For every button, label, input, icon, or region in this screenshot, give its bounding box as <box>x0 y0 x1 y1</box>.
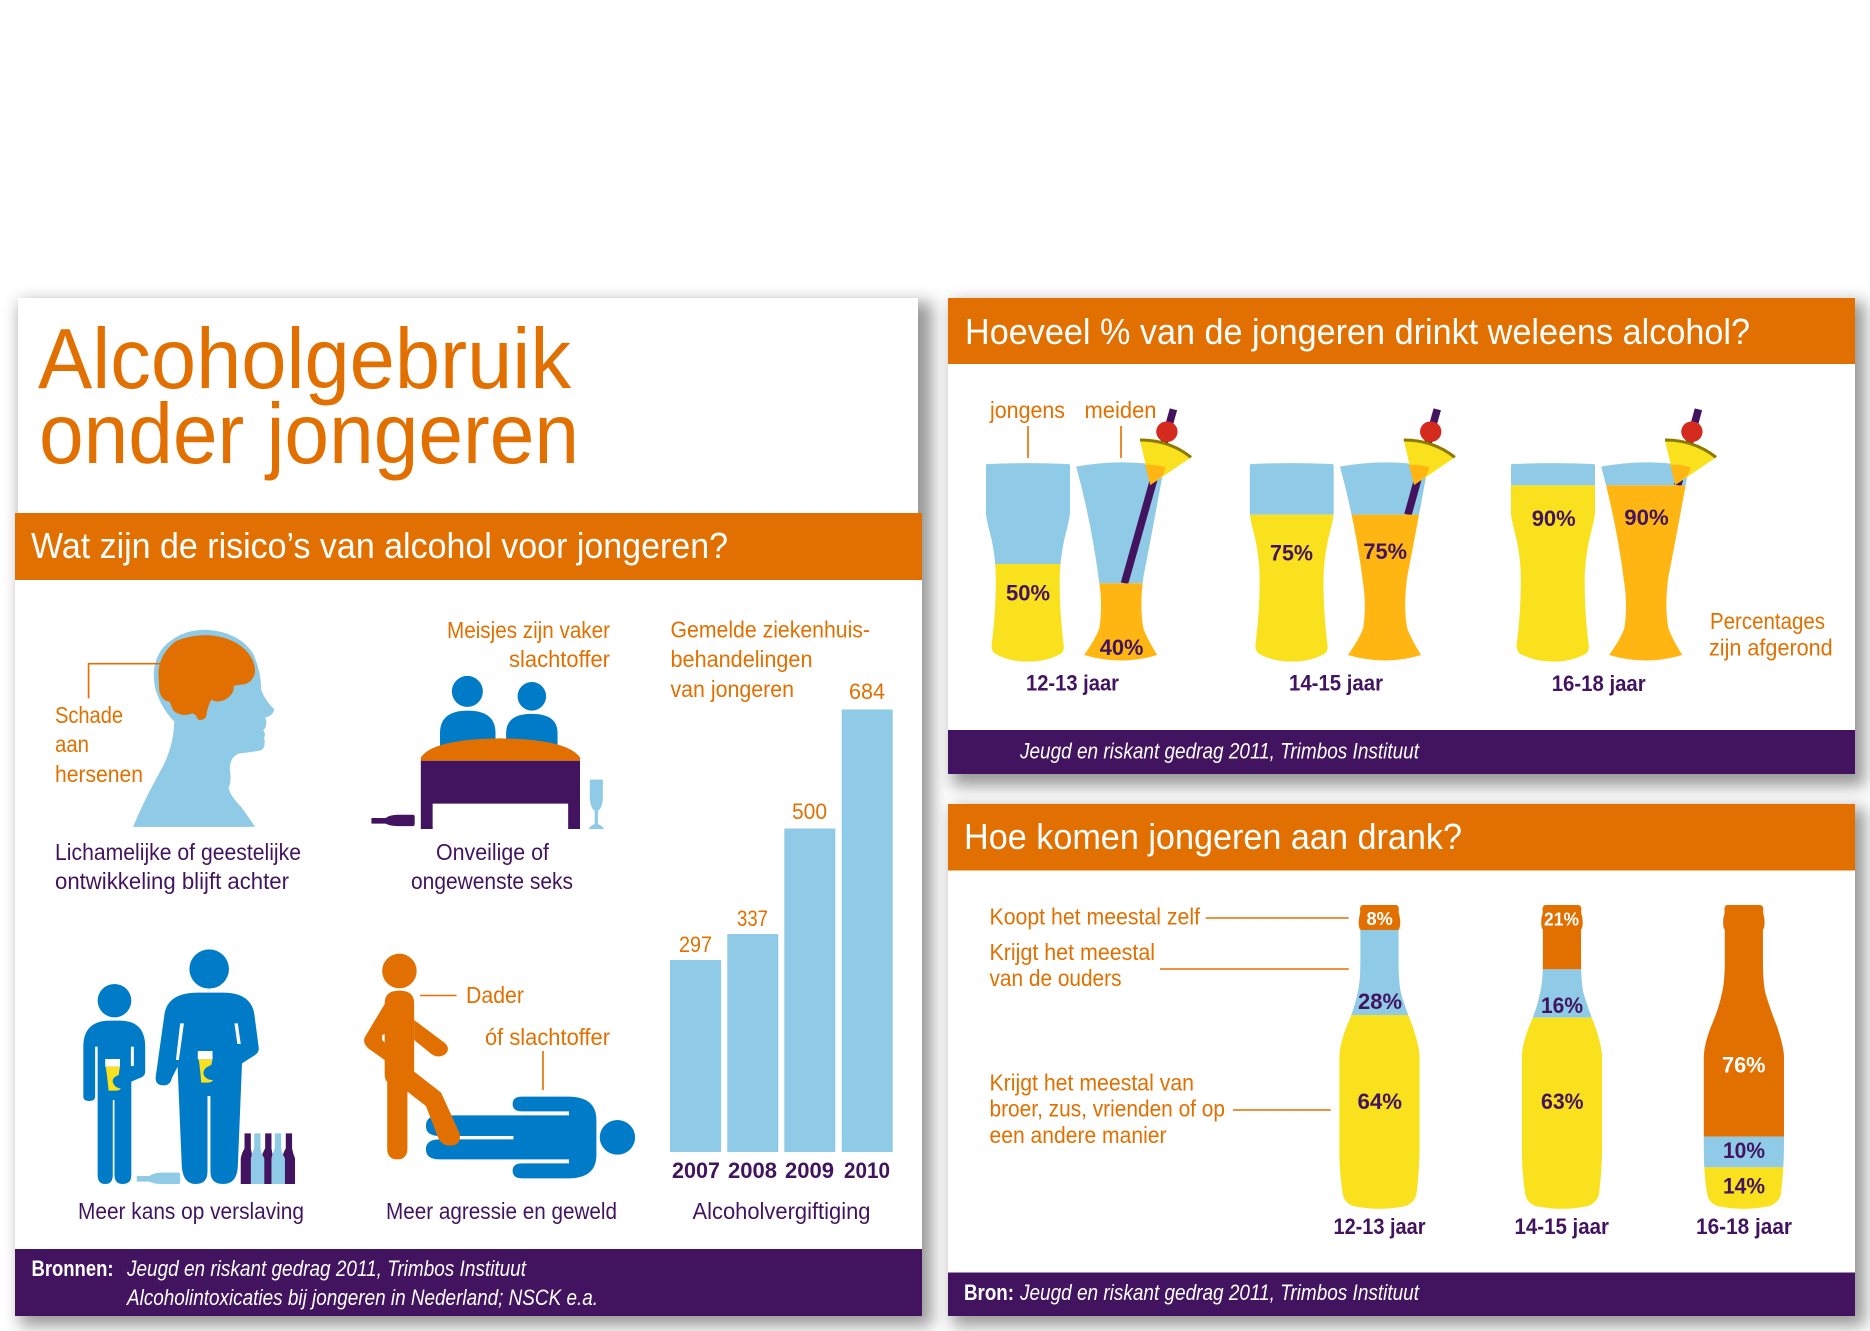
bar chart: hospital treatments: 2009 <box>785 1158 834 1183</box>
label: from siblings, friends: een andere manier <box>990 1122 1167 1148</box>
label: brain damage: hersenen <box>55 761 143 787</box>
bottle: 14-15 years: 63% <box>1541 1089 1584 1114</box>
chart title: Gemelde ziekenhuis- <box>670 616 870 642</box>
glasses: 14-15 years <box>1245 409 1455 696</box>
bottle: 14-15 years: 16% <box>1541 993 1583 1018</box>
bottle: 16-18 years <box>1696 900 1792 1239</box>
icon: head with brain <box>89 630 274 827</box>
footer: source top right: Jeugd en riskant gedrag 2011, Trimbos Instituut <box>1019 738 1420 764</box>
label: girls: meiden <box>1084 397 1156 423</box>
glasses: 16-18 years: 90% <box>1624 505 1669 530</box>
title: Alcoholgebruik <box>38 312 571 407</box>
footer: sources: Alcoholintoxicaties bij jongeren in Nederland; NSCK e.a. <box>125 1285 598 1310</box>
label: girls more often victim: slachtoffer <box>509 646 610 672</box>
bottle: 12-13 years: 64% <box>1358 1089 1402 1114</box>
label: brain damage: Schade <box>55 702 123 728</box>
bar chart: hospital treatments: 2010 <box>844 1158 890 1183</box>
label: offender: Dader <box>466 982 524 1008</box>
bottle: 12-13 years <box>1333 900 1427 1239</box>
label: girls more often victim <box>447 617 610 672</box>
bar chart: hospital treatments <box>670 616 893 1183</box>
heading: percentage drinking <box>948 298 1855 364</box>
text: unsafe sex: Onveilige of <box>436 839 550 865</box>
bar chart: hospital treatments: 2007 <box>672 1158 720 1183</box>
text: unsafe sex <box>411 839 573 894</box>
text: development: ontwikkeling blijft achter <box>55 868 289 894</box>
footer: source bottom right <box>948 1272 1855 1316</box>
glasses: 16-18 years: 90% <box>1532 506 1576 531</box>
icon: offender kicking victim <box>364 954 635 1178</box>
bar chart: hospital treatments: 2008 <box>728 1158 777 1183</box>
bottle: 12-13 years: 12-13 jaar <box>1334 1214 1426 1239</box>
glasses: 16-18 years: 16-18 jaar <box>1552 671 1646 696</box>
glasses: 12-13 years: 40% <box>1100 635 1143 660</box>
label: or victim: óf slachtoffer <box>485 1024 610 1050</box>
label: or victim <box>485 1024 610 1090</box>
label: boys <box>989 397 1065 458</box>
chart title: behandelingen <box>670 646 812 672</box>
heading: percentage drinking: Hoeveel % van de jongeren drinkt weleens alcohol? <box>965 311 1750 352</box>
glasses: 12-13 years: 50% <box>1006 581 1050 606</box>
bar chart: hospital treatments: 500 <box>792 799 827 824</box>
heading: risks: Wat zijn de risico’s van alcohol voor jongeren? <box>31 525 728 566</box>
glasses: 14-15 years: 14-15 jaar <box>1289 671 1383 696</box>
bottle: 16-18 years: 16-18 jaar <box>1696 1214 1792 1239</box>
heading: source of drinks: Hoe komen jongeren aan drank? <box>964 816 1462 857</box>
label: brain damage: aan <box>55 731 89 757</box>
text: alcohol poisoning: Alcoholvergiftiging <box>692 1198 870 1224</box>
title <box>38 312 579 482</box>
label: boys: jongens <box>989 397 1065 423</box>
panel: how youngsters get drinks <box>948 804 1865 1326</box>
icon: two drinkers with bottles <box>83 949 295 1184</box>
glasses: 12-13 years: 12-13 jaar <box>1026 671 1119 696</box>
footer: sources: Jeugd en riskant gedrag 2011, Trimbos Instituut <box>126 1256 527 1281</box>
bottle: 12-13 years: 28% <box>1358 989 1402 1014</box>
bottle: 16-18 years: 76% <box>1722 1053 1766 1078</box>
glasses: 14-15 years: 75% <box>1363 539 1407 564</box>
title: onder jongeren <box>39 387 579 482</box>
footer: sources: Bronnen: <box>32 1256 114 1281</box>
note: rounded percentages: Percentages <box>1710 608 1825 634</box>
bar chart: hospital treatments: 337 <box>737 906 768 931</box>
icon: bed with couple <box>371 676 604 829</box>
panel: how many drink <box>948 298 1865 786</box>
chart title <box>670 616 870 702</box>
text: addiction: Meer kans op verslaving <box>78 1198 304 1224</box>
label: brain damage <box>55 702 143 787</box>
glasses: 14-15 years: 75% <box>1270 540 1313 566</box>
footer: source bottom right: Bron: <box>964 1280 1014 1305</box>
label: girls more often victim: Meisjes zijn vaker <box>447 617 610 643</box>
bar chart: hospital treatments: 684 <box>849 679 885 704</box>
heading: source of drinks <box>948 804 1855 870</box>
text: unsafe sex: ongewenste seks <box>411 868 573 894</box>
bottle: 14-15 years <box>1514 900 1610 1239</box>
text: development <box>55 839 301 894</box>
label: buys it: Koopt het meestal zelf <box>990 903 1201 929</box>
bar chart: hospital treatments: 297 <box>679 932 712 957</box>
label: from siblings, friends <box>990 1069 1331 1148</box>
bottle: 16-18 years: 14% <box>1723 1174 1765 1198</box>
bottle: 14-15 years: 14-15 jaar <box>1514 1214 1609 1239</box>
label: from parents: Krijgt het meestal <box>990 939 1155 965</box>
footer: sources <box>15 1249 922 1316</box>
label: from siblings, friends: Krijgt het meestal van <box>990 1069 1194 1095</box>
note: rounded percentages: zijn afgerond <box>1709 635 1833 661</box>
glasses: 12-13 years <box>981 409 1191 696</box>
footer: source top right <box>948 730 1855 774</box>
panel: risks <box>15 298 932 1326</box>
text: aggression: Meer agressie en geweld <box>386 1198 617 1224</box>
heading: risks <box>15 513 922 580</box>
note: rounded percentages <box>1709 608 1833 661</box>
bottle: 14-15 years: 21% <box>1544 910 1579 930</box>
text: development: Lichamelijke of geestelijke <box>55 839 301 865</box>
chart title: van jongeren <box>670 676 794 702</box>
bottle: 12-13 years: 8% <box>1366 909 1393 929</box>
label: from parents: van de ouders <box>990 965 1122 991</box>
bottle: 16-18 years: 10% <box>1723 1138 1765 1163</box>
footer: source bottom right: Jeugd en riskant gedrag 2011, Trimbos Instituut <box>1019 1280 1420 1305</box>
label: offender <box>420 982 524 1008</box>
glasses: 16-18 years <box>1506 409 1716 696</box>
label: from siblings, friends: broer, zus, vrienden of op <box>990 1096 1225 1122</box>
label: girls <box>1084 397 1156 458</box>
label: from parents <box>990 939 1349 991</box>
